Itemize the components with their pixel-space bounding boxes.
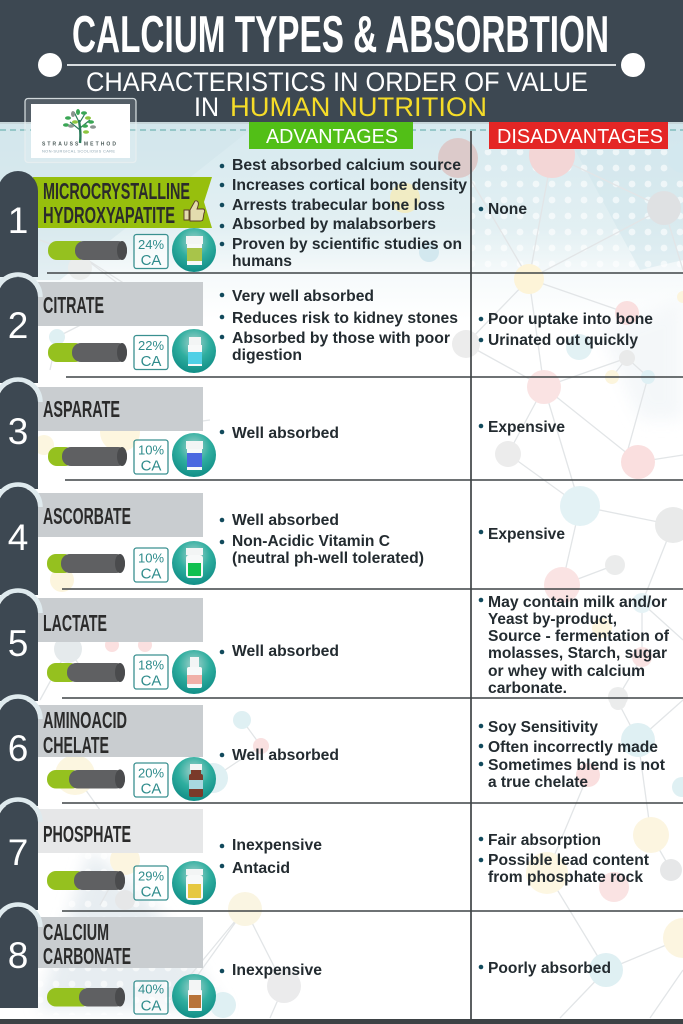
number tab 5: 5 <box>8 623 28 664</box>
row 1: microcrystalline hydroxyapatite <box>0 157 527 277</box>
disadvantages list: Poor uptake into bone <box>488 311 653 328</box>
number tab 1 <box>0 171 38 277</box>
icon: bottle <box>172 541 216 585</box>
subtitle line 2: IN <box>194 92 219 122</box>
disadvantages list: Yeast by-product, <box>488 611 617 628</box>
disadvantages list: Soy Sensitivity <box>488 719 598 736</box>
header band <box>0 0 683 124</box>
disadvantages list: carbonate. <box>488 680 567 697</box>
disadvantages list: from phosphate rock <box>488 869 644 886</box>
percent box: 10% <box>138 442 164 458</box>
name banner: CARBONATE <box>43 943 131 969</box>
disadvantages list <box>479 311 653 349</box>
row 4: ascorbate <box>0 485 565 595</box>
percent box: CA <box>141 884 161 900</box>
disadvantages list: Fair absorption <box>488 832 601 849</box>
icon: bottle <box>172 228 216 272</box>
name banner: ASPARATE <box>43 396 120 422</box>
percent box: CA <box>141 252 161 269</box>
advantages list: Absorbed by those with poor <box>232 330 450 347</box>
logo: Strauss Method: STRAUSS METHOD <box>42 142 116 148</box>
name banner <box>38 705 203 758</box>
percent box: 40% <box>138 982 164 996</box>
advantages list: Proven by scientific studies on <box>232 236 462 253</box>
advantages list: (neutral ph-well tolerated) <box>232 550 424 567</box>
disadvantages list: None <box>488 201 527 218</box>
name banner: CALCIUM <box>43 919 109 945</box>
advantages list: Antacid <box>232 860 290 877</box>
disadvantages list: Poorly absorbed <box>488 960 611 977</box>
name banner <box>38 282 203 326</box>
row 3: asparate <box>0 380 565 489</box>
advantages list: Reduces risk to kidney stones <box>232 310 458 327</box>
advantages list <box>220 512 424 567</box>
advantages list: Well absorbed <box>232 747 339 764</box>
number tab 2 <box>0 275 40 383</box>
name banner <box>38 598 203 642</box>
advantages list: Increases cortical bone density <box>232 177 467 194</box>
name banner: PHOSPHATE <box>43 821 131 847</box>
number tab 5 <box>0 590 40 701</box>
disadvantages list: Sometimes blend is not <box>488 757 665 774</box>
icon: tree <box>63 109 96 143</box>
name banner <box>38 387 203 431</box>
disadvantages list: May contain milk and/or <box>488 594 667 611</box>
disadvantages list: Possible lead content <box>488 852 649 869</box>
advantages list: Absorbed by malabsorbers <box>232 216 436 233</box>
name banner: CITRATE <box>43 292 104 318</box>
logo: Strauss Method: NON-SURGICAL SCOLIOSIS CARE <box>42 148 115 154</box>
number tab 3: 3 <box>8 411 28 452</box>
advantages list <box>220 837 322 877</box>
column header: advantages: ADVANTAGES <box>266 126 398 148</box>
name banner: CHELATE <box>43 732 109 758</box>
advantages list: Very well absorbed <box>232 288 374 305</box>
disadvantages list: Expensive <box>488 526 565 543</box>
number tab 4: 4 <box>8 517 28 558</box>
icon: bottle <box>172 329 216 373</box>
number tab 1: 1 <box>8 200 28 241</box>
row 8: calcium carbonate <box>0 904 611 1018</box>
advantages list: humans <box>232 253 292 270</box>
advantages list: Inexpensive <box>232 837 322 854</box>
percent box <box>134 981 168 1014</box>
icon: thumbs up <box>184 201 205 221</box>
percent box <box>134 763 168 798</box>
title divider with end dots <box>38 53 645 77</box>
number tab 8: 8 <box>8 935 28 976</box>
progress bar 22% <box>48 343 127 362</box>
row 6: aminoacid chelate <box>0 696 665 806</box>
column header: disadvantages: DISADVANTAGES <box>497 126 663 148</box>
disadvantages list <box>479 594 670 697</box>
progress bar 20% <box>47 770 125 788</box>
advantages list: Well absorbed <box>232 512 339 529</box>
number tab 4 <box>0 485 40 595</box>
advantages list <box>220 157 467 270</box>
number tab 3 <box>0 380 40 489</box>
percent box <box>134 655 168 690</box>
advantages list: Well absorbed <box>232 643 339 660</box>
subtitle line 1: CHARACTERISTICS IN ORDER OF VALUE <box>86 67 588 97</box>
disadvantages list <box>479 719 665 791</box>
progress bar 24% <box>48 241 127 260</box>
icon: bottle <box>172 757 216 801</box>
advantages list: Inexpensive <box>232 962 322 979</box>
disadvantages list: molasses, Starch, sugar <box>488 645 667 662</box>
disadvantages list: a true chelate <box>488 774 588 791</box>
percent box: CA <box>141 672 161 690</box>
percent box <box>134 440 168 474</box>
disadvantages list <box>479 832 649 886</box>
number tab 8 <box>0 904 40 1008</box>
percent box <box>134 548 168 582</box>
percent box: CA <box>141 353 161 370</box>
percent box <box>134 866 168 900</box>
percent box: 22% <box>138 338 164 353</box>
icon: bottle <box>172 433 216 477</box>
subtitle line 2: HUMAN NUTRITION <box>230 92 487 122</box>
disadvantages list: Source - fermentation of <box>488 628 670 645</box>
percent box: CA <box>141 998 161 1014</box>
percent box: 18% <box>138 658 164 672</box>
advantages list: Non-Acidic Vitamin C <box>232 533 390 550</box>
name banner: ASCORBATE <box>43 503 131 529</box>
name banner: AMINOACID <box>43 707 127 733</box>
name banner <box>38 493 203 537</box>
number tab 2: 2 <box>8 305 28 346</box>
advantages list: Well absorbed <box>232 425 339 442</box>
icon: bottle <box>172 650 216 694</box>
icon: bottle <box>172 861 216 905</box>
row 5: lactate <box>0 590 670 701</box>
name banner <box>33 177 212 228</box>
disadvantages list: Urinated out quickly <box>488 332 638 349</box>
percent box <box>134 234 168 269</box>
percent box: CA <box>141 780 161 798</box>
number tab 7 <box>0 800 40 910</box>
progress bar 18% <box>47 663 125 682</box>
disadvantages list: Expensive <box>488 419 565 436</box>
percent box: 10% <box>138 550 164 566</box>
number tab 7: 7 <box>8 832 28 873</box>
number tab 6: 6 <box>8 728 28 769</box>
percent box: 20% <box>138 766 164 780</box>
name banner: HYDROXYAPATITE <box>43 202 175 228</box>
percent box <box>134 336 168 370</box>
row 7: phosphate <box>0 800 649 910</box>
name banner: LACTATE <box>43 610 107 636</box>
advantages list: digestion <box>232 347 302 364</box>
percent box: 29% <box>138 868 164 884</box>
percent box: 24% <box>138 237 164 252</box>
percent box: CA <box>141 566 161 582</box>
progress bar 10% <box>47 554 125 573</box>
advantages list: Arrests trabecular bone loss <box>232 197 445 214</box>
name banner <box>38 809 203 853</box>
percent box: CA <box>141 458 161 474</box>
row 2: citrate <box>0 275 653 383</box>
icon: bottle <box>172 974 216 1018</box>
advantages list: Best absorbed calcium source <box>232 157 461 174</box>
name banner <box>38 917 203 969</box>
disadvantages list: Often incorrectly made <box>488 739 658 756</box>
disadvantages list: or whey with calcium <box>488 663 645 680</box>
progress bar 40% <box>47 988 125 1006</box>
number tab 6 <box>0 696 40 806</box>
progress bar 29% <box>47 871 125 890</box>
progress bar 10% <box>48 447 127 466</box>
advantages list <box>220 288 458 364</box>
name banner: MICROCRYSTALLINE <box>43 178 190 204</box>
logo: Strauss Method <box>25 98 136 162</box>
column header: advantages <box>249 122 413 149</box>
